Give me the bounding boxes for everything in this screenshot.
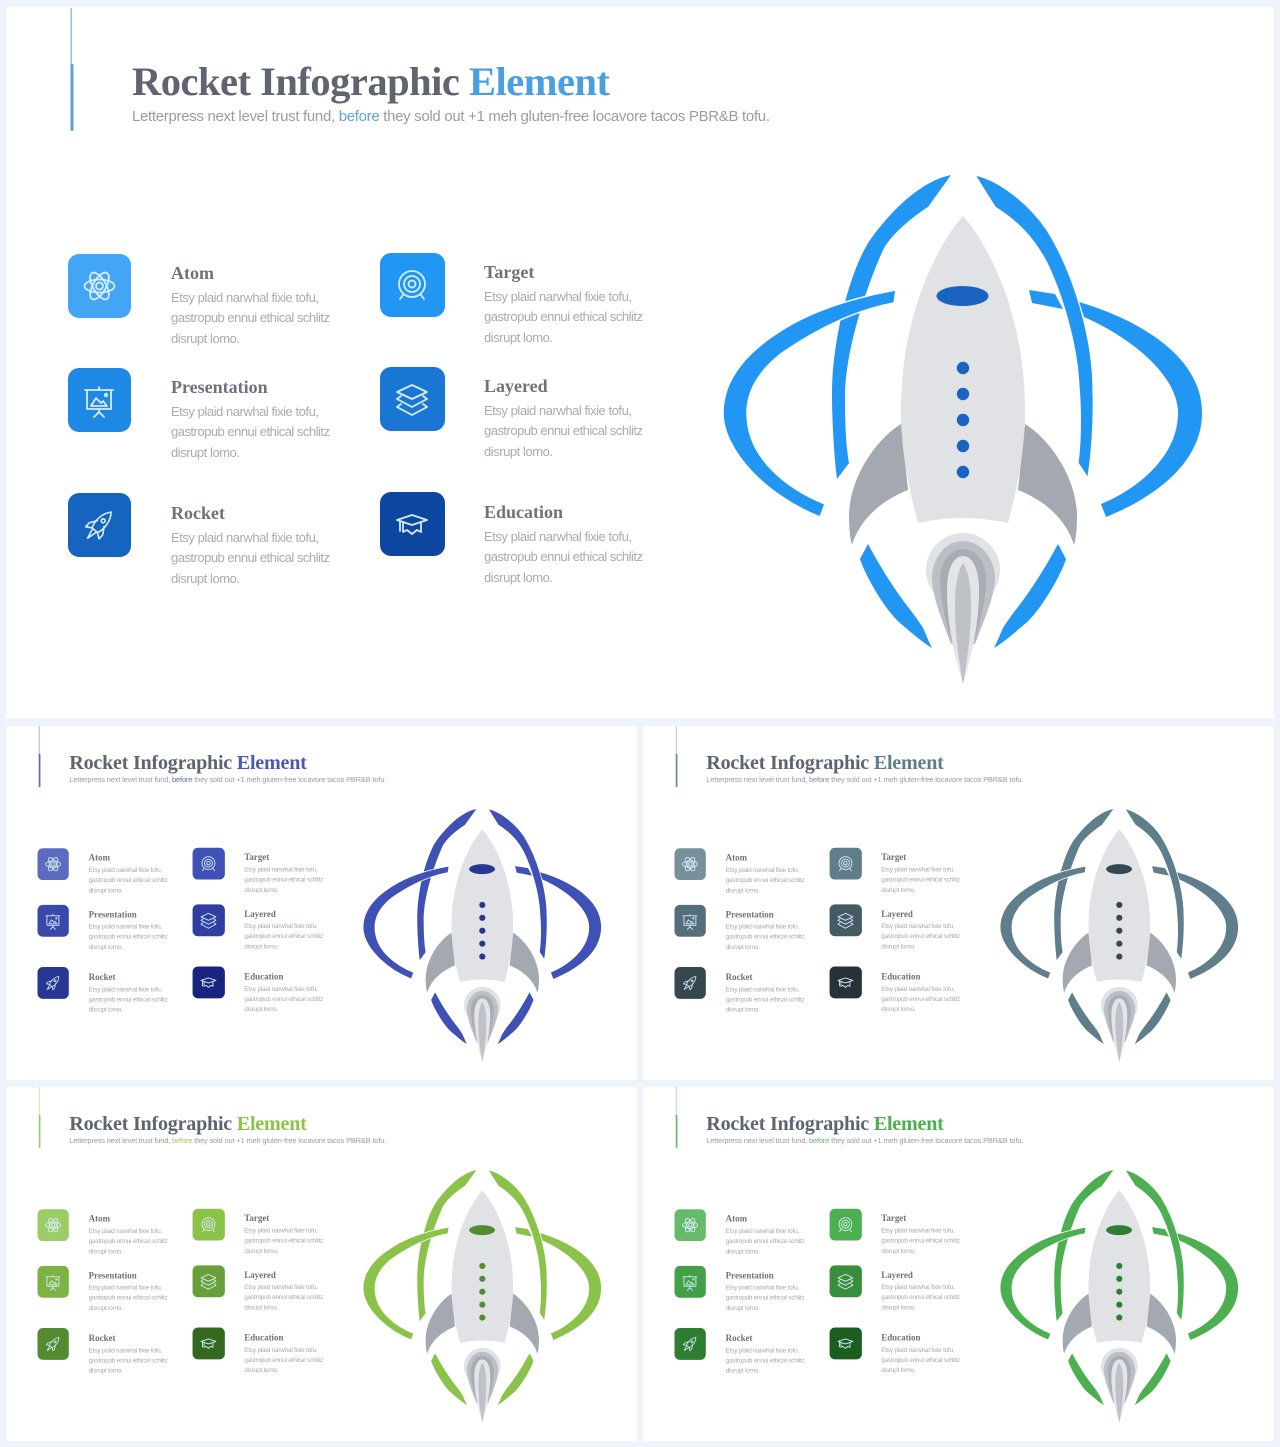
- item: Rocket: [674, 967, 805, 1014]
- item: Layered: gastropub ennui ethical schlitz: [484, 423, 643, 438]
- item: Education: disrupt lomo.: [881, 1367, 916, 1374]
- item: Rocket: gastropub ennui ethical schlitz: [171, 550, 330, 565]
- panel: green slide: [643, 1087, 1274, 1441]
- item: Atom: Etsy plaid narwhal fixie tofu,: [89, 867, 162, 874]
- item: Education: Etsy plaid narwhal fixie tofu,: [881, 986, 955, 993]
- item: Atom: Atom: [171, 263, 214, 283]
- item: Education: gastropub ennui ethical schlitz: [244, 996, 323, 1003]
- item: Target: disrupt lomo.: [881, 887, 916, 894]
- item: Layered: Etsy plaid narwhal fixie tofu,: [881, 1284, 955, 1291]
- item: Target: [193, 1209, 323, 1255]
- item: Rocket: Rocket: [726, 1333, 753, 1343]
- item: Presentation: [674, 905, 805, 951]
- item: Education: Education: [881, 1332, 921, 1342]
- item: Target: gastropub ennui ethical schlitz: [881, 1238, 960, 1245]
- item: Rocket: disrupt lomo.: [726, 1368, 760, 1375]
- item: Target: Target: [881, 852, 906, 862]
- item: Rocket: Rocket: [726, 972, 753, 982]
- rocket illustration: [723, 175, 1202, 684]
- subtitle: Letterpress next level trust fund, before they sold out +1 meh gluten-free locavore tacos PBR&B tofu.: [706, 775, 1023, 784]
- item: Layered: disrupt lomo.: [881, 944, 916, 951]
- item: Layered: Etsy plaid narwhal fixie tofu,: [244, 923, 318, 930]
- item: Education: gastropub ennui ethical schlitz: [881, 1357, 960, 1364]
- item: Rocket: disrupt lomo.: [89, 1007, 123, 1014]
- item: Layered: [830, 904, 960, 951]
- item: Layered: disrupt lomo.: [881, 1305, 916, 1312]
- item: Atom: [37, 1209, 168, 1255]
- item: Education: gastropub ennui ethical schlitz: [244, 1357, 323, 1364]
- item: Rocket: disrupt lomo.: [171, 571, 240, 586]
- item: Target: gastropub ennui ethical schlitz: [244, 877, 323, 884]
- item: Atom: gastropub ennui ethical schlitz: [726, 1238, 805, 1245]
- title: Rocket Infographic Element: [132, 59, 610, 104]
- item: Education: [830, 1328, 960, 1374]
- panel: indigo slide: [6, 726, 637, 1080]
- item: Atom: gastropub ennui ethical schlitz: [89, 1238, 168, 1245]
- item: Rocket: gastropub ennui ethical schlitz: [726, 996, 805, 1003]
- subtitle: Letterpress next level trust fund, before they sold out +1 meh gluten-free locavore tacos PBR&B tofu.: [132, 108, 770, 125]
- item: Rocket: gastropub ennui ethical schlitz: [89, 996, 168, 1003]
- item: Education: gastropub ennui ethical schlitz: [881, 996, 960, 1003]
- accent bar: [676, 1087, 677, 1148]
- item: Target: Target: [881, 1213, 906, 1223]
- item: Rocket: [37, 1328, 168, 1375]
- title: Rocket Infographic Element: [706, 1113, 944, 1135]
- item: Education: Etsy plaid narwhal fixie tofu,: [244, 1347, 318, 1354]
- item: Layered: gastropub ennui ethical schlitz: [881, 1294, 960, 1301]
- item: Education: [193, 1328, 323, 1374]
- item: Target: Etsy plaid narwhal fixie tofu,: [881, 867, 955, 874]
- item: Atom: Atom: [89, 1214, 111, 1224]
- item: Rocket: Etsy plaid narwhal fixie tofu,: [89, 986, 162, 993]
- item: Layered: disrupt lomo.: [244, 1305, 279, 1312]
- item: Target: Etsy plaid narwhal fixie tofu,: [484, 289, 632, 304]
- item: Layered: gastropub ennui ethical schlitz: [881, 933, 960, 940]
- item: Atom: Atom: [726, 853, 748, 863]
- item: Atom: disrupt lomo.: [726, 887, 760, 894]
- item: Education: Etsy plaid narwhal fixie tofu,: [244, 986, 318, 993]
- item: Atom: Etsy plaid narwhal fixie tofu,: [726, 867, 799, 874]
- item: Rocket: Rocket: [89, 1333, 116, 1343]
- item: Rocket: gastropub ennui ethical schlitz: [89, 1357, 168, 1364]
- item: Rocket: Etsy plaid narwhal fixie tofu,: [726, 986, 799, 993]
- item: Presentation: Presentation: [726, 909, 774, 919]
- item: Layered: Etsy plaid narwhal fixie tofu,: [484, 403, 632, 418]
- item: Education: disrupt lomo.: [244, 1006, 279, 1013]
- item: Presentation: gastropub ennui ethical schlitz: [171, 424, 330, 439]
- item: Atom: disrupt lomo.: [726, 1248, 760, 1255]
- item: Layered: Layered: [881, 909, 913, 919]
- item: Layered: disrupt lomo.: [484, 444, 553, 459]
- item: Layered: gastropub ennui ethical schlitz: [244, 933, 323, 940]
- item: Target: disrupt lomo.: [484, 330, 553, 345]
- item: Presentation: Etsy plaid narwhal fixie tofu,: [726, 924, 799, 931]
- item: Target: Target: [484, 262, 534, 282]
- item: Presentation: [37, 905, 168, 951]
- item: Layered: Layered: [244, 1270, 276, 1280]
- item: Presentation: Presentation: [89, 1270, 137, 1280]
- item: Target: gastropub ennui ethical schlitz: [244, 1238, 323, 1245]
- item: Atom: gastropub ennui ethical schlitz: [726, 877, 805, 884]
- item: Layered: [193, 904, 323, 951]
- item: Presentation: disrupt lomo.: [171, 445, 240, 460]
- subtitle: Letterpress next level trust fund, before they sold out +1 meh gluten-free locavore tacos PBR&B tofu.: [69, 775, 386, 784]
- title: Rocket Infographic Element: [69, 752, 307, 774]
- item: Target: gastropub ennui ethical schlitz: [881, 877, 960, 884]
- item: Presentation: disrupt lomo.: [89, 1305, 123, 1312]
- item: Education: Education: [881, 971, 921, 981]
- item: Atom: [68, 254, 330, 346]
- item: Presentation: gastropub ennui ethical schlitz: [89, 934, 168, 941]
- item: Rocket: Rocket: [89, 972, 116, 982]
- item: Atom: Atom: [89, 853, 111, 863]
- item: Layered: [380, 367, 643, 459]
- item: Presentation: disrupt lomo.: [89, 944, 123, 951]
- item: Atom: Etsy plaid narwhal fixie tofu,: [171, 290, 319, 305]
- item: Rocket: disrupt lomo.: [89, 1368, 123, 1375]
- item: Target: Etsy plaid narwhal fixie tofu,: [244, 867, 318, 874]
- item: Rocket: gastropub ennui ethical schlitz: [726, 1357, 805, 1364]
- item: Layered: Layered: [881, 1270, 913, 1280]
- panel: main blue slide: [6, 7, 1274, 718]
- accent bar: [39, 1087, 40, 1148]
- accent bar: [676, 726, 677, 787]
- item: Rocket: [37, 967, 168, 1014]
- item: Rocket: Etsy plaid narwhal fixie tofu,: [726, 1347, 799, 1354]
- item: Layered: disrupt lomo.: [244, 944, 279, 951]
- item: Education: disrupt lomo.: [244, 1367, 279, 1374]
- item: Presentation: [37, 1266, 168, 1312]
- item: Layered: [193, 1265, 323, 1312]
- item: Atom: gastropub ennui ethical schlitz: [89, 877, 168, 884]
- item: Rocket: [674, 1328, 805, 1375]
- item: Education: Education: [244, 971, 284, 981]
- subtitle: Letterpress next level trust fund, before they sold out +1 meh gluten-free locavore tacos PBR&B tofu.: [69, 1136, 386, 1145]
- item: Atom: [674, 1209, 805, 1255]
- item: Target: gastropub ennui ethical schlitz: [484, 309, 643, 324]
- item: Rocket: [68, 493, 330, 586]
- item: Layered: Layered: [484, 376, 548, 396]
- item: Presentation: disrupt lomo.: [726, 1305, 760, 1312]
- item: Presentation: Presentation: [726, 1270, 774, 1280]
- accent bar: [70, 8, 74, 131]
- item: Target: disrupt lomo.: [244, 1248, 279, 1255]
- item: Presentation: gastropub ennui ethical schlitz: [726, 934, 805, 941]
- item: Layered: Etsy plaid narwhal fixie tofu,: [881, 923, 955, 930]
- item: Presentation: Presentation: [171, 377, 268, 397]
- item: Target: [830, 1209, 960, 1255]
- item: Education: Etsy plaid narwhal fixie tofu,: [881, 1347, 955, 1354]
- item: Rocket: Etsy plaid narwhal fixie tofu,: [171, 530, 319, 545]
- item: Presentation: gastropub ennui ethical schlitz: [726, 1295, 805, 1302]
- rocket illustration: [363, 1170, 601, 1423]
- item: Presentation: Etsy plaid narwhal fixie tofu,: [726, 1285, 799, 1292]
- item: Atom: disrupt lomo.: [89, 887, 123, 894]
- item: Atom: [674, 848, 805, 894]
- item: Atom: Etsy plaid narwhal fixie tofu,: [726, 1228, 799, 1235]
- item: Education: [380, 492, 643, 585]
- item: Education: Education: [484, 502, 563, 522]
- item: Atom: disrupt lomo.: [171, 331, 240, 346]
- item: Education: [193, 967, 323, 1013]
- item: Target: [830, 848, 960, 894]
- item: Target: [193, 848, 323, 894]
- item: Presentation: [68, 368, 330, 460]
- item: Atom: [37, 848, 168, 894]
- item: Atom: Etsy plaid narwhal fixie tofu,: [89, 1228, 162, 1235]
- subtitle: Letterpress next level trust fund, before they sold out +1 meh gluten-free locavore tacos PBR&B tofu.: [706, 1136, 1023, 1145]
- rocket illustration: [363, 809, 601, 1062]
- panel: slate slide: [643, 726, 1274, 1080]
- item: Presentation: [674, 1266, 805, 1312]
- item: Presentation: Presentation: [89, 909, 137, 919]
- rocket illustration: [1000, 809, 1238, 1062]
- item: Education: Etsy plaid narwhal fixie tofu,: [484, 529, 632, 544]
- item: Education: disrupt lomo.: [484, 570, 553, 585]
- item: Layered: [830, 1265, 960, 1312]
- item: Target: Target: [244, 852, 269, 862]
- item: Rocket: disrupt lomo.: [726, 1007, 760, 1014]
- item: Atom: gastropub ennui ethical schlitz: [171, 310, 330, 325]
- item: Target: [380, 253, 643, 345]
- item: Layered: gastropub ennui ethical schlitz: [244, 1294, 323, 1301]
- panel: light green slide: [6, 1087, 637, 1441]
- item: Rocket: Etsy plaid narwhal fixie tofu,: [89, 1347, 162, 1354]
- item: Layered: Etsy plaid narwhal fixie tofu,: [244, 1284, 318, 1291]
- item: Presentation: Etsy plaid narwhal fixie tofu,: [171, 404, 319, 419]
- item: Education: gastropub ennui ethical schlitz: [484, 549, 643, 564]
- item: Atom: Atom: [726, 1214, 748, 1224]
- item: Education: [830, 967, 960, 1013]
- item: Education: disrupt lomo.: [881, 1006, 916, 1013]
- item: Presentation: Etsy plaid narwhal fixie tofu,: [89, 1285, 162, 1292]
- title: Rocket Infographic Element: [69, 1113, 307, 1135]
- item: Education: Education: [244, 1332, 284, 1342]
- item: Target: Target: [244, 1213, 269, 1223]
- item: Presentation: disrupt lomo.: [726, 944, 760, 951]
- item: Layered: Layered: [244, 909, 276, 919]
- item: Presentation: Etsy plaid narwhal fixie tofu,: [89, 924, 162, 931]
- item: Rocket: Rocket: [171, 503, 225, 523]
- accent bar: [39, 726, 40, 787]
- item: Presentation: gastropub ennui ethical schlitz: [89, 1295, 168, 1302]
- rocket illustration: [1000, 1170, 1238, 1423]
- item: Target: disrupt lomo.: [244, 887, 279, 894]
- title: Rocket Infographic Element: [706, 752, 944, 774]
- item: Target: disrupt lomo.: [881, 1248, 916, 1255]
- item: Target: Etsy plaid narwhal fixie tofu,: [244, 1228, 318, 1235]
- item: Target: Etsy plaid narwhal fixie tofu,: [881, 1228, 955, 1235]
- item: Atom: disrupt lomo.: [89, 1248, 123, 1255]
